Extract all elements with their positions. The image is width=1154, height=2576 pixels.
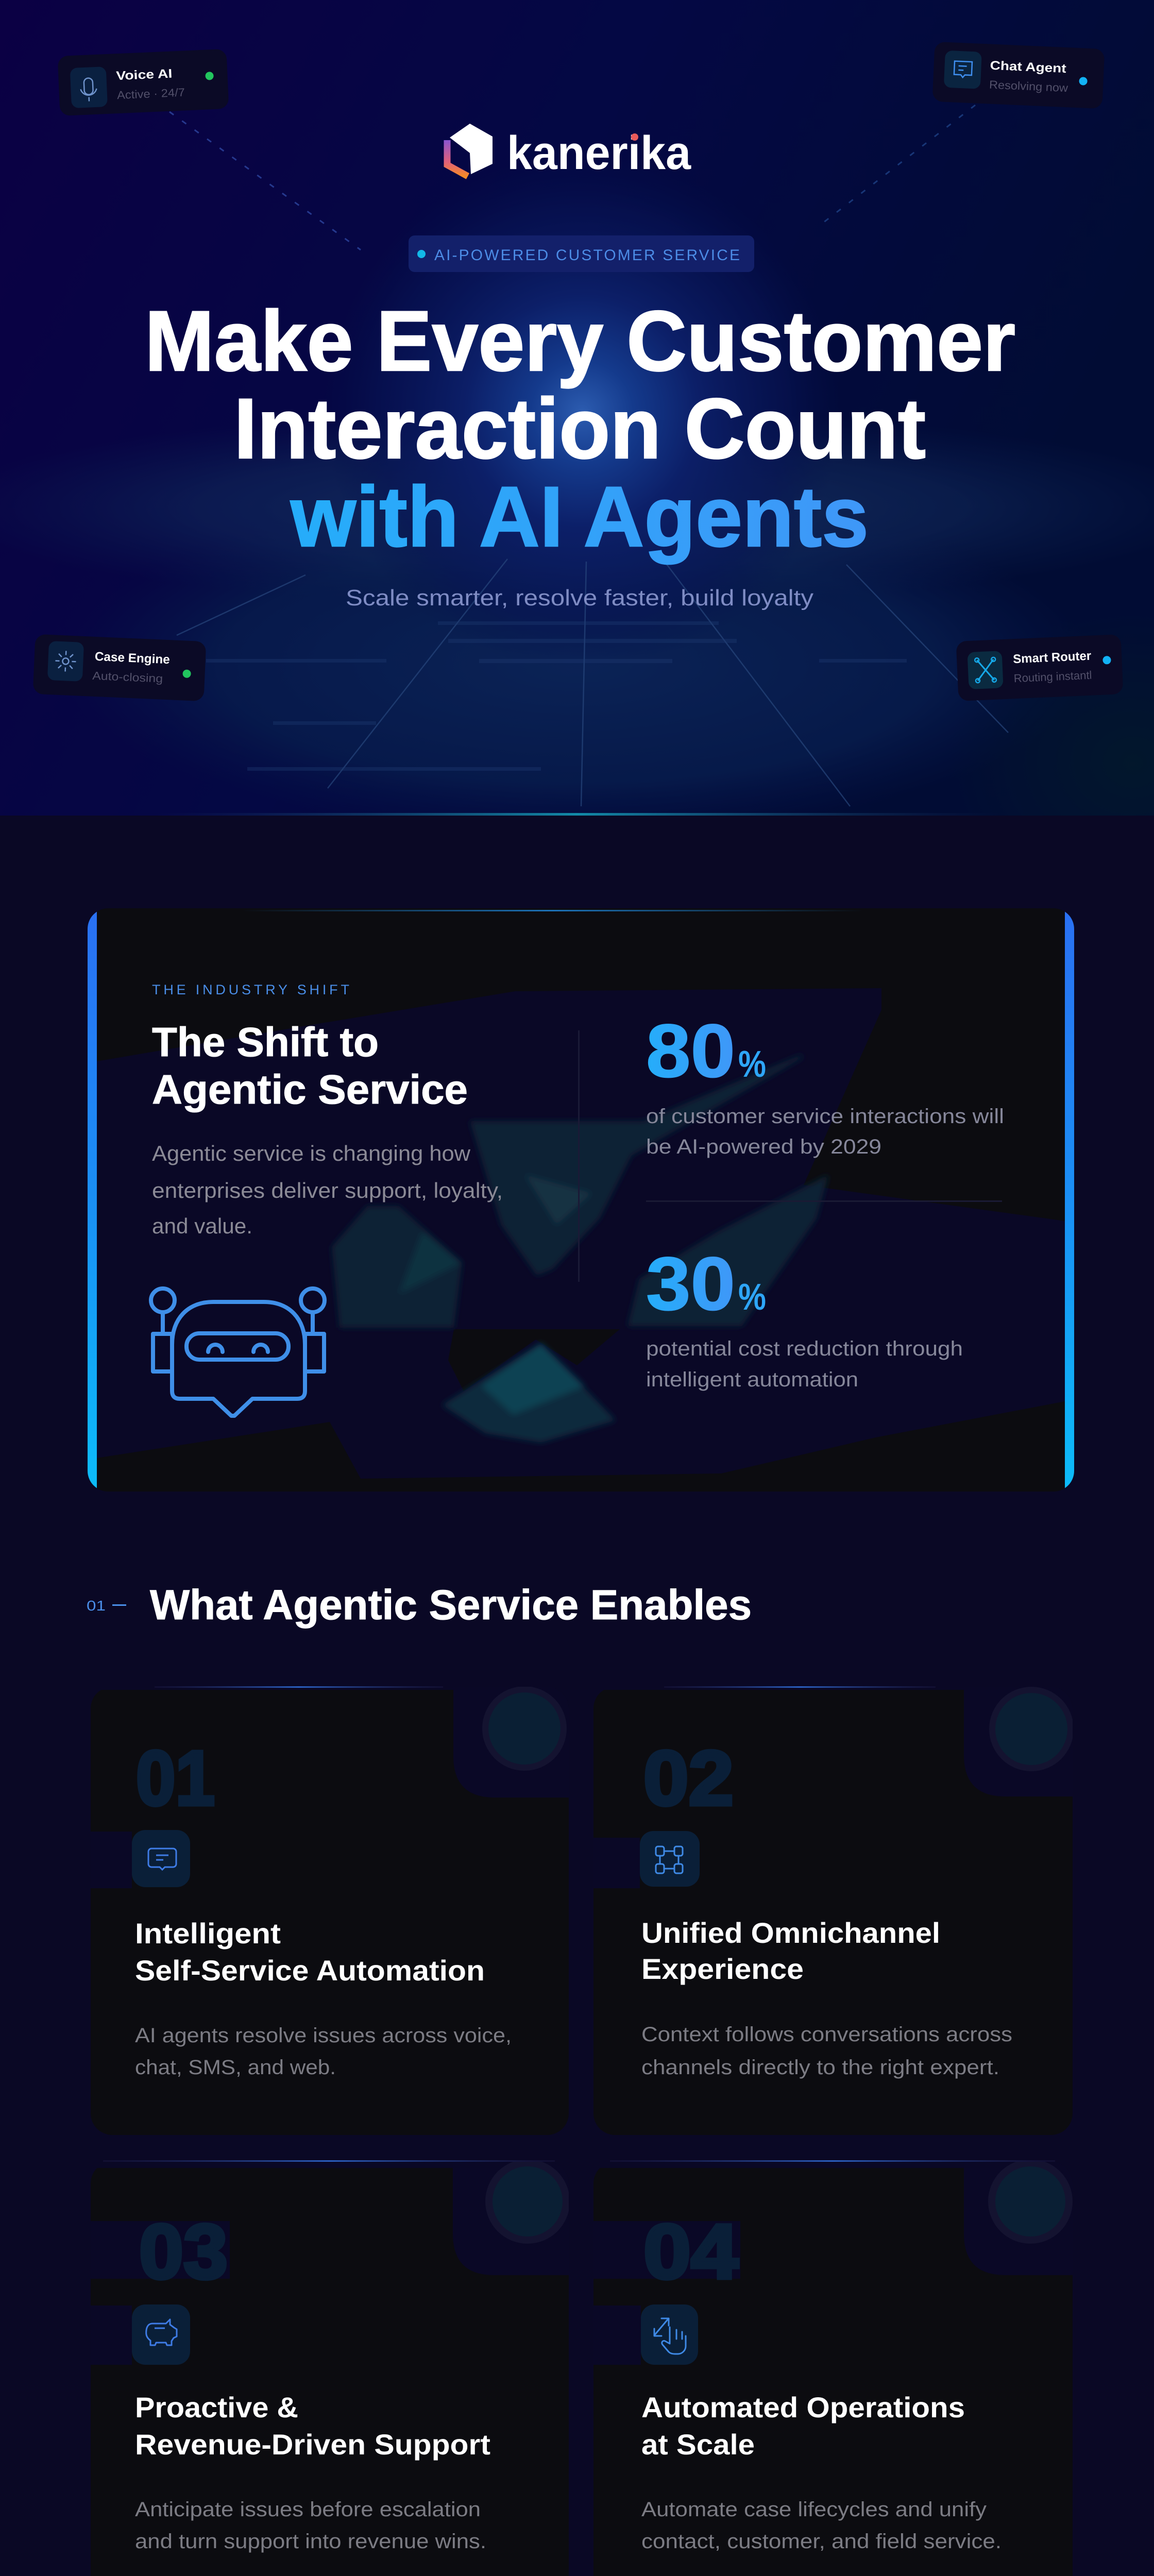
card text: Self-Service Automation xyxy=(135,1954,485,1987)
dashed connector: Voice AI xyxy=(169,112,361,250)
card text: Intelligent xyxy=(135,1917,281,1950)
card background xyxy=(593,1687,1082,2135)
icon: microphone xyxy=(70,66,108,108)
hero background xyxy=(0,0,1154,816)
stat: 30% xyxy=(646,1242,963,1391)
section heading: What Agentic Service Enables xyxy=(150,1582,752,1629)
card text: Revenue-Driven Support xyxy=(135,2428,490,2461)
chip: Smart Route xyxy=(956,634,1123,701)
chip: Chat Agent xyxy=(932,42,1105,109)
panel text block: The Shift to xyxy=(152,1019,379,1065)
card text: contact, customer, and field service. xyxy=(641,2530,1002,2553)
subtitle: Scale smarter, resolve faster, build loyalty xyxy=(346,585,813,611)
icon: gear xyxy=(47,641,84,682)
title: Make Every Customer xyxy=(145,294,1015,389)
card text: Automate case lifecycles and unify xyxy=(641,2498,987,2521)
chip: Chat Agent: Resolving now xyxy=(989,78,1068,94)
dashed connector: Chat Agent xyxy=(821,105,975,225)
card text xyxy=(135,1917,512,2079)
section heading: 01 xyxy=(87,1598,106,1614)
card 2: unified omnichannel experience xyxy=(593,1686,1082,2135)
card top line xyxy=(155,1686,443,1688)
stat: 80% xyxy=(646,1009,1004,1158)
number: 02 xyxy=(643,1735,734,1821)
card text: Anticipate issues before escalation xyxy=(135,2498,481,2521)
chip: Voice AI xyxy=(58,49,229,116)
logo: kanerika xyxy=(447,124,691,179)
card top line xyxy=(103,2160,555,2162)
eyebrow pill xyxy=(409,235,754,272)
icon: chat xyxy=(944,50,982,89)
icon: chat bubble xyxy=(132,1830,190,1887)
card text xyxy=(641,1917,1012,2079)
vertical divider xyxy=(578,1030,580,1282)
icon: hand with arrows xyxy=(641,2304,698,2365)
card text: Experience xyxy=(641,1953,804,1985)
stat: 80%: be AI-powered by 2029 xyxy=(646,1136,881,1158)
hero section xyxy=(0,0,1154,816)
stat: 80%: 80 xyxy=(646,1009,735,1093)
stat: 30%: % xyxy=(738,1277,766,1318)
hero bottom line xyxy=(155,813,999,816)
stat: 30%: 30 xyxy=(646,1242,735,1326)
card text: channels directly to the right expert. xyxy=(641,2056,999,2079)
stat divider xyxy=(646,1200,1002,1202)
card text: AI agents resolve issues across voice, xyxy=(135,2024,512,2047)
panel top line xyxy=(242,910,863,911)
title: with AI Agents xyxy=(290,469,869,565)
panel text block: and value. xyxy=(152,1214,252,1238)
card top line xyxy=(610,2160,1055,2162)
card 4: automated operations at scale xyxy=(593,2159,1082,2576)
chip: Case Engine: Auto-closing xyxy=(92,669,163,685)
chip: Smart Route: Routing instantly xyxy=(1013,668,1098,685)
stat: 30%: intelligent automation xyxy=(646,1368,858,1391)
chip: Smart Route: Smart Router xyxy=(1013,649,1092,666)
chip: Voice AI: Voice AI xyxy=(116,66,173,83)
icon: logo cube xyxy=(447,124,493,176)
card 1: intelligent self-service automation xyxy=(91,1686,572,2135)
card text: Automated Operations xyxy=(641,2391,965,2424)
eyebrow pill: AI-POWERED CUSTOMER SERVICE xyxy=(434,247,740,264)
card text: Unified Omnichannel xyxy=(641,1917,940,1949)
chip: Chat Agent: Chat Agent xyxy=(990,59,1066,76)
card text: at Scale xyxy=(641,2428,755,2461)
panel: the shift to agentic service xyxy=(88,908,1074,1492)
number: 01 xyxy=(136,1735,215,1821)
stat: 80%: of customer service interactions will xyxy=(646,1105,1004,1128)
icon: route xyxy=(968,651,1004,689)
number: 03 xyxy=(139,2208,228,2295)
card text: chat, SMS, and web. xyxy=(135,2056,336,2079)
card text: Proactive & xyxy=(135,2391,298,2424)
logo: kanerika: kanerika xyxy=(507,127,691,179)
panel text block: Agentic Service xyxy=(152,1066,468,1112)
panel text block: THE INDUSTRY SHIFT xyxy=(152,982,349,997)
card top line xyxy=(664,1686,936,1688)
card background xyxy=(593,2159,1082,2576)
title: Interaction Count xyxy=(234,381,926,477)
icon: piggy bank xyxy=(132,2304,190,2365)
chip: Case Engine xyxy=(33,634,206,701)
card text xyxy=(641,2391,1002,2553)
card background xyxy=(91,2159,571,2576)
card background xyxy=(91,1686,572,2135)
title xyxy=(145,294,1015,565)
panel background xyxy=(88,908,1074,1492)
stat: 80%: % xyxy=(738,1044,766,1085)
card text: Context follows conversations across xyxy=(641,2023,1012,2046)
stat: 30%: potential cost reduction through xyxy=(646,1337,963,1360)
panel text block: Agentic service is changing how xyxy=(152,1141,471,1165)
card text: and turn support into revenue wins. xyxy=(135,2530,486,2553)
card 3: proactive and revenue-driven support xyxy=(91,2159,571,2576)
number: 04 xyxy=(643,2208,738,2295)
icon: robot xyxy=(151,1289,325,1416)
panel text block: enterprises deliver support, loyalty, xyxy=(152,1178,503,1202)
icon: network xyxy=(640,1831,700,1887)
panel text block xyxy=(152,982,503,1238)
chip: Case Engine: Case Engine xyxy=(94,650,170,667)
chip: Voice AI: Active · 24/7 xyxy=(116,86,185,101)
card text xyxy=(135,2391,490,2553)
